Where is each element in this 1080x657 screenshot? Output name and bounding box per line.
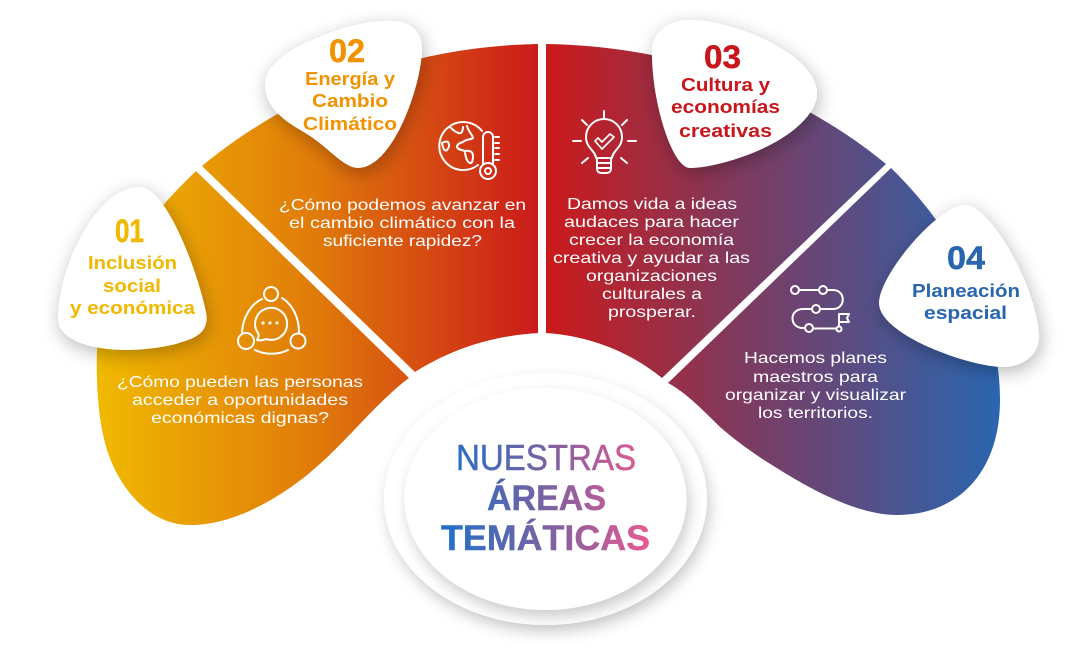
- icon: light bulb with check: [573, 111, 636, 173]
- callout blob 04: [879, 205, 1039, 367]
- text block: segment 03: prosperar.: [608, 304, 696, 321]
- title: nuestras áreas temáticas: TEMÁTICAS: [441, 518, 650, 558]
- text block: segment 03: Damos vida a ideas: [567, 196, 737, 213]
- text block: segment 04: [725, 350, 907, 422]
- text block: segment 01: [117, 374, 363, 427]
- heading: cultura y economías creativas: Cultura y: [681, 74, 771, 95]
- text block: segment 04: organizar y visualizar: [725, 387, 907, 404]
- text block: segment 03: organizaciones: [586, 268, 717, 285]
- text block: segment 02: suficiente rapidez?: [323, 233, 482, 250]
- text block: segment 02: [279, 197, 526, 250]
- text block: segment 01: acceder a oportunidades: [132, 392, 348, 409]
- icon: globe with thermometer: [439, 122, 499, 179]
- heading: energía y cambio climático: Cambio: [312, 90, 388, 111]
- text block: segment 04: Hacemos planes: [744, 350, 887, 367]
- panel: segment 04 background: [668, 168, 1000, 515]
- number 02: 02: [329, 33, 365, 69]
- text block: segment 02: el cambio climático con la: [289, 215, 515, 232]
- panel: segment 03 background: [546, 44, 886, 378]
- heading: inclusión social y económica: social: [103, 275, 161, 296]
- heading: planeación espacial: espacial: [924, 302, 1007, 323]
- text block: segment 03: crecer la economía: [569, 232, 734, 249]
- text block: segment 01: ¿Cómo pueden las personas: [117, 374, 363, 391]
- text block: segment 02: ¿Cómo podemos avanzar en: [279, 197, 526, 214]
- text block: segment 03: audaces para hacer: [564, 214, 740, 231]
- centre outer disc: [384, 373, 707, 625]
- centre inner disc: [404, 388, 686, 610]
- heading: planeación espacial: [912, 280, 1020, 323]
- heading: energía y cambio climático: Energía y: [305, 68, 396, 89]
- callout blob 02: [265, 21, 422, 168]
- number 03: 03: [704, 39, 741, 75]
- number 01: 01: [115, 213, 144, 249]
- text block: segment 04: maestros para: [753, 369, 878, 386]
- icon: chat network: [238, 287, 306, 354]
- text block: segment 03: culturales a: [602, 286, 702, 303]
- text block: segment 04: los territorios.: [758, 405, 873, 422]
- text block: segment 01: económicas dignas?: [151, 410, 329, 427]
- callout blob 03: [652, 20, 817, 168]
- heading: cultura y economías creativas: creativas: [679, 120, 772, 141]
- icon: route with flag: [791, 286, 849, 332]
- title: nuestras áreas temáticas: [441, 437, 650, 558]
- heading: energía y cambio climático: [303, 68, 397, 134]
- title: nuestras áreas temáticas: NUESTRAS: [456, 437, 636, 478]
- heading: inclusión social y económica: y económica: [70, 297, 196, 318]
- panel: segment 01 background: [97, 171, 409, 525]
- heading: energía y cambio climático: Climático: [303, 113, 397, 134]
- heading: cultura y economías creativas: economías: [671, 96, 780, 117]
- heading: planeación espacial: Planeación: [912, 280, 1020, 301]
- heading: inclusión social y económica: Inclusión: [88, 252, 177, 273]
- heading: cultura y economías creativas: [671, 74, 780, 141]
- text block: segment 03: creativa y ayudar a las: [553, 250, 750, 267]
- panel: segment 02 background: [202, 44, 538, 372]
- text block: segment 03: [553, 196, 750, 321]
- number 04: 04: [947, 240, 985, 276]
- title: nuestras áreas temáticas: ÁREAS: [487, 478, 606, 518]
- callout blob 01: [58, 187, 207, 350]
- heading: inclusión social y económica: [70, 252, 196, 318]
